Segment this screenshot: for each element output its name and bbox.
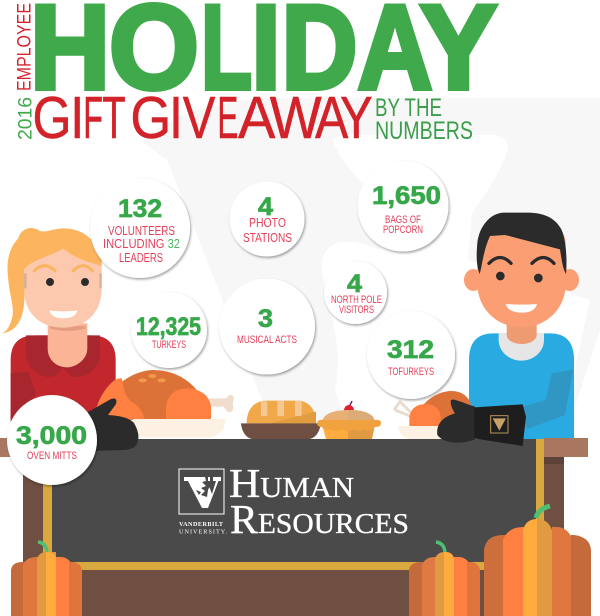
man collar [499,333,544,361]
stat bubble: 132 volunteers [90,178,190,278]
woman eyebrows [34,266,92,271]
chalkboard [52,439,536,562]
title: GIFT GIVEAWAY: I [169,85,183,151]
man neck [507,320,537,344]
stat bubble: 132 volunteers: 132 [118,195,162,223]
woman collar [26,335,100,377]
stat bubble: 4 photo stations: STATIONS [243,231,292,245]
turkey body [100,370,211,420]
stat bubble: 4 north pole visitors: NORTH POLE [331,294,382,306]
stat bubble: 132 volunteers: LEADERS [119,251,163,265]
pumpkin: left [11,542,82,616]
title: GIFT GIVEAWAY: F [83,85,103,151]
brown table front [23,439,564,616]
stat bubble: 3 musical acts: 3 [258,305,273,333]
mitt: left hand [88,399,138,451]
logo: Vanderbilt Human Resources [179,460,409,542]
stat bubble: 1,650 bags of popcorn: 1,650 [372,182,441,210]
background watermark: faint V [143,98,600,438]
stat bubble: 3,000 oven mitts [7,395,97,485]
stat bubble: 12,325 turkeys: TURKEYS [152,339,186,351]
Resources: RESOURCES [230,496,409,542]
man ears [464,269,579,291]
counter ledge right [544,438,588,457]
Human: HUMAN [229,460,354,506]
title: GIFT GIVEAWAY: A [238,85,276,151]
food: bread in bowl [241,401,321,439]
title: GIFT GIVEAWAY: E [217,85,238,151]
stat bubble: 4 north pole visitors: 4 [347,270,362,298]
title: GIFT GIVEAWAY: G [32,85,72,151]
title: HOLIDAY [30,0,497,114]
gold frame [43,439,544,570]
turkey left [94,370,234,437]
counter ledge left [0,438,23,457]
woman eyes [46,278,89,286]
mitt: right hand with Vanderbilt cuff [437,400,526,446]
title: BY THE NUMBERS: BY THE [375,94,442,122]
stat bubble: 132 volunteers: VOLUNTEERS [108,224,175,238]
stat bubble: 1,650 bags of popcorn: BAGS OF [385,214,421,226]
pumpkin: middle [409,542,480,616]
logo: Vanderbilt Human Resources: UNIVERSITY. [179,528,227,536]
woman head [24,240,102,328]
pumpkin: large right [484,506,591,616]
stat bubble: 4 photo stations [230,182,304,256]
title: GIFT GIVEAWAY [32,85,373,151]
table and chalkboard [0,438,588,616]
woman hair [2,228,102,333]
stat bubble: 312 tofurkeys [367,311,455,399]
stat bubble: 4 north pole visitors [324,261,387,324]
title: GIFT GIVEAWAY: V [183,85,216,151]
woman body [11,335,116,447]
stat bubble: 12,325 turkeys [131,292,207,368]
stat bubble: 1,650 bags of popcorn [358,160,448,252]
man head [477,220,566,327]
bone [208,395,234,412]
man eyebrows [489,257,554,263]
man hair [477,213,566,274]
V shield [179,469,224,514]
stat bubble: 132 volunteers: INCLUDING 32 [103,237,180,251]
woman neck [48,323,87,367]
stat bubble: 4 north pole visitors: VISITORS [339,304,374,316]
man figure [394,213,579,440]
woman smile [49,311,77,318]
stat bubble: 4 photo stations: 4 [258,193,273,221]
food: cherry pie [317,401,381,439]
stat bubble: 3 musical acts: MUSICAL ACTS [237,334,297,346]
stat bubble: 4 photo stations: PHOTO [249,216,286,230]
title: GIFT GIVEAWAY: W [270,85,322,151]
title: BY THE NUMBERS: NUMBERS [375,117,473,145]
title: 2016 vertical: 2016 [16,97,36,140]
title: GIFT GIVEAWAY: T [102,85,126,151]
woman figure [2,228,116,447]
man smile [506,304,537,313]
plate [133,419,226,437]
stat bubble: 3 musical acts [219,278,315,374]
stat bubble: 12,325 turkeys: 12,325 [136,313,201,341]
stat bubble: 3,000 oven mitts: 3,000 [16,422,87,450]
man arm shadow [522,369,573,429]
stat bubble: 312 tofurkeys: 312 [387,336,434,364]
title: GIFT GIVEAWAY: A [315,85,349,151]
stat bubble: 312 tofurkeys: TOFURKEYS [388,366,434,378]
mitt logo [491,416,508,433]
title: GIFT GIVEAWAY: I [70,85,84,151]
man body [469,333,574,440]
Vanderbilt University wordmark: VANDERBILT [179,521,224,528]
title: BY THE NUMBERS [375,94,473,145]
stat bubble: 3,000 oven mitts: OVEN MITTS [27,450,77,462]
stat bubble: 1,650 bags of popcorn: POPCORN [383,224,423,236]
title: GIFT GIVEAWAY: G [130,85,171,151]
turkey right [394,391,471,439]
title: GIFT GIVEAWAY: Y [340,85,373,151]
man eyes [496,272,543,282]
